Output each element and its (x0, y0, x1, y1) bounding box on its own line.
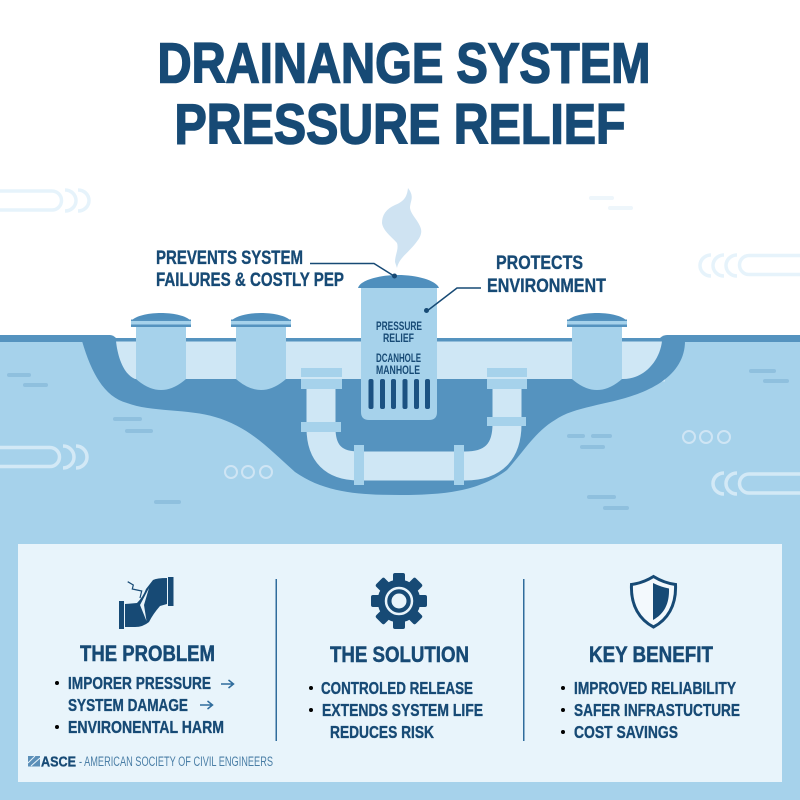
footer: asce credit: ASCE (41, 754, 76, 770)
callout: protects environment: PROTECTS (496, 253, 583, 274)
solution list (309, 678, 483, 742)
title: DRAINANGE SYSTEM (158, 32, 650, 96)
small manhole right (567, 313, 627, 390)
column: the solution (309, 573, 483, 742)
icon: gear (371, 573, 427, 629)
footer: asce credit: - AMERICAN SOCIETY OF CIVIL ENGINEERS (79, 754, 273, 769)
heading: the problem: THE PROBLEM (80, 641, 215, 666)
solution list: CONTROLED RELEASE (321, 678, 473, 698)
pressure relief manhole: DCANHOLE (376, 351, 421, 365)
footer: asce credit (28, 754, 273, 770)
pipe (301, 368, 527, 485)
title (158, 32, 650, 156)
pressure relief manhole: RELIEF (383, 331, 414, 345)
callout: prevents system failures (156, 248, 397, 291)
title: PRESSURE RELIEF (174, 92, 626, 156)
benefit list (561, 678, 740, 742)
icon: shield (631, 576, 676, 627)
small manhole left (131, 313, 191, 390)
problem list: IMPORER PRESSURE (68, 673, 211, 693)
small manhole middle (231, 313, 291, 390)
heading: key benefit: KEY BENEFIT (589, 642, 713, 667)
callout: prevents system failures: PREVENTS SYSTEM (156, 248, 303, 269)
arrow (221, 680, 234, 688)
callout: protects environment (424, 253, 606, 313)
benefit list: IMPROVED RELIABILITY (574, 678, 736, 698)
problem list: ENVIRONENTAL HARM (68, 717, 224, 737)
callout: protects environment: ENVIRONMENT (487, 276, 606, 297)
benefit list: COST SAVINGS (574, 722, 678, 742)
icon: steam (382, 188, 421, 268)
pressure relief manhole (358, 275, 439, 420)
column: the problem (55, 577, 234, 737)
icon: asce logo (28, 756, 40, 766)
drainage basin (82, 341, 685, 495)
callout: prevents system failures: FAILURES & COSTLY PEP (156, 270, 344, 291)
arrow (200, 701, 212, 709)
water and ground background (0, 335, 800, 800)
solution list: EXTENDS SYSTEM LIFE (322, 700, 483, 720)
problem list: SYSTEM DAMAGE (68, 695, 188, 715)
problem list (55, 673, 224, 737)
pressure relief manhole: MANHOLE (376, 363, 420, 377)
column: key benefit (561, 576, 740, 742)
heading: the solution: THE SOLUTION (330, 642, 469, 667)
solution list: REDUCES RISK (330, 722, 434, 742)
benefit list: SAFER INFRASTUCTURE (574, 700, 740, 720)
icon: cracked pipe (119, 577, 174, 629)
pressure relief manhole: PRESSURE (376, 319, 422, 333)
panel: summary (18, 544, 782, 782)
